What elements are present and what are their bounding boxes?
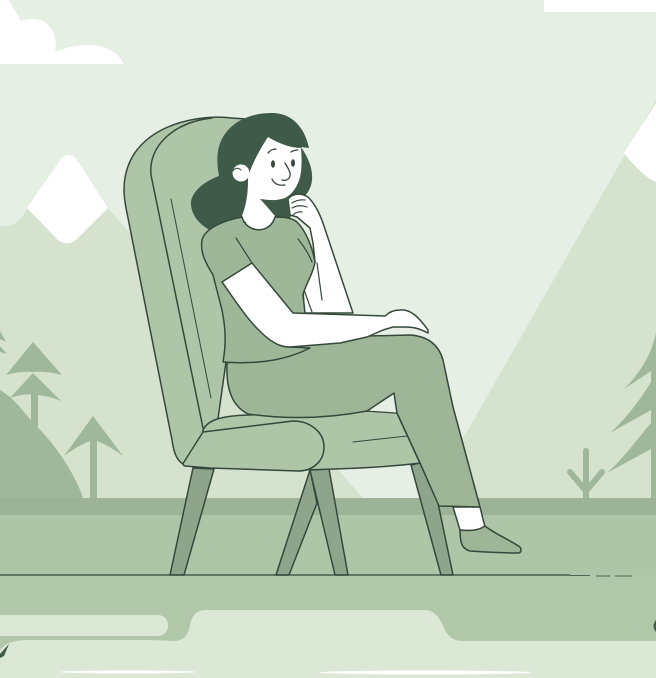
chair backrest: [124, 117, 260, 466]
lake shape: [0, 610, 656, 678]
shirt: [202, 217, 315, 363]
floor line: [0, 574, 570, 576]
arm lines: [303, 263, 322, 312]
chair backrest inner line: [151, 118, 212, 428]
nose: [282, 163, 290, 180]
left mountain: [0, 155, 363, 498]
front arm and hand: [222, 263, 428, 347]
chair leg: middle front: [310, 469, 348, 575]
woman: [191, 113, 521, 553]
chair backrest crease: [171, 199, 211, 398]
cloud top right: [544, 0, 656, 12]
shore mark right: [654, 620, 656, 632]
shirt fold right: [298, 239, 312, 262]
cloud top left: [0, 0, 124, 64]
sprout plant: [570, 451, 602, 498]
neck and face: [242, 137, 302, 229]
snow cap: left mountain: [27, 155, 108, 243]
ear and neck and face: [232, 137, 302, 229]
chair: [124, 117, 453, 575]
pants: [227, 335, 480, 507]
snow cap: right mountain: [624, 103, 656, 182]
tree: small left arrow pine: [64, 416, 123, 500]
fingers: [292, 200, 307, 215]
smile: [272, 179, 285, 185]
water glint left: [60, 670, 196, 674]
neck: [242, 190, 275, 228]
ground: [0, 515, 656, 575]
shirt fold left: [236, 238, 252, 263]
ground band dark: [0, 498, 656, 515]
eyebrows: [268, 149, 298, 153]
chin shadow: [260, 197, 290, 218]
ear: [232, 164, 250, 182]
trees on left hill: [0, 331, 62, 430]
hill on the left: [0, 390, 83, 505]
chair leg: right: [411, 463, 453, 575]
right pine tree: [607, 333, 656, 498]
shoe: [460, 526, 521, 553]
chair leg: front left: [170, 468, 214, 575]
floor line faded dashes: [570, 574, 632, 577]
hair: [191, 113, 312, 230]
foreground floor: [0, 575, 656, 678]
seat crease: [353, 436, 407, 442]
sock: [453, 507, 485, 531]
shore shadow mark: [0, 644, 9, 658]
raised arm: [288, 194, 353, 313]
lake pale strip: [0, 615, 168, 636]
seat front roll: [183, 421, 324, 471]
chair seat back cushion: [200, 411, 420, 470]
water glint right: [319, 670, 531, 674]
chair leg: middle back: [276, 470, 317, 575]
gap under the thigh: [367, 393, 397, 413]
right mountain: [420, 100, 656, 498]
eyes: [271, 160, 275, 168]
